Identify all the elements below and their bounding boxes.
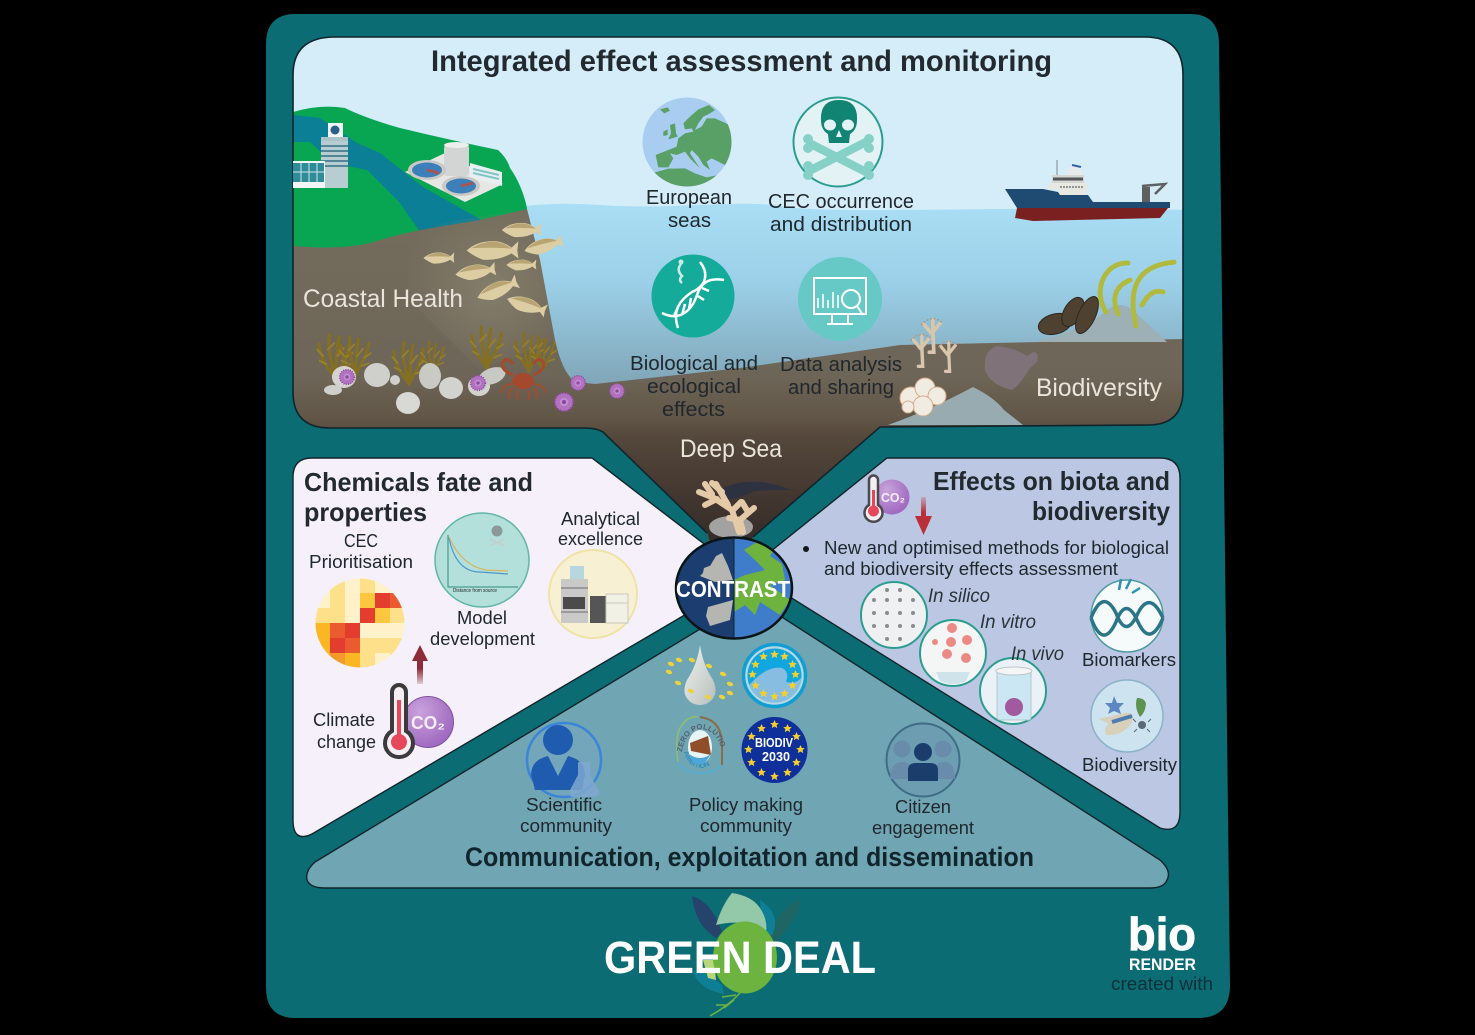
contrast globe logo: CONTRAST	[676, 576, 790, 602]
panel: communication, exploitation and dissemination	[306, 536, 1170, 926]
heading: Effects on biota and	[933, 466, 1170, 496]
icon: co2 bubble	[874, 480, 910, 514]
illustration: corals and sponge on rock	[888, 319, 1023, 425]
label: in silico: In silico	[928, 586, 990, 607]
icon: biodiv 2030: 2030	[762, 749, 790, 764]
illustration: research ship	[1005, 160, 1170, 221]
icon: in silico	[861, 582, 927, 648]
label: scientific community: community	[520, 815, 613, 836]
label: citizen engagement	[872, 796, 974, 838]
label: policy making community	[689, 794, 803, 836]
label: climate change: change	[317, 731, 376, 752]
icon: zero pollution ambition: ZERO POLLUTION	[676, 724, 725, 752]
label: Data analysis	[780, 354, 902, 376]
label: analytical excellence	[558, 508, 643, 549]
label: Biological and	[630, 353, 758, 375]
heading: Communication, exploitation and dissemination	[465, 842, 1034, 872]
label: citizen engagement: engagement	[872, 817, 974, 838]
icon: eu water circle	[744, 644, 806, 710]
label: in vitro: In vitro	[980, 612, 1036, 633]
illustration: rock with mussels and seaweed	[1033, 262, 1176, 342]
label: CEC occurrence	[768, 191, 914, 213]
panel: effects on biota and biodiversity	[760, 458, 1180, 829]
label: analytical excellence: Analytical	[561, 508, 640, 529]
item: european seas	[642, 98, 733, 232]
heat map	[315, 578, 405, 668]
sea floor and cliff	[290, 209, 1190, 560]
icon: co2 bubble	[402, 696, 454, 748]
illustration: flatfish	[985, 346, 1038, 390]
biorender logo: bio	[1128, 908, 1196, 960]
icon: biodiv 2030: BIODIV	[755, 735, 793, 750]
bullet text: New and optimised methods for biological	[824, 537, 1169, 558]
label: citizen engagement: Citizen	[895, 796, 951, 817]
icon: thermometer	[864, 476, 882, 522]
icon: water droplet with eu stars	[665, 645, 734, 705]
biorender logo: created with	[1111, 973, 1213, 994]
item: biological and ecological effects	[630, 254, 758, 421]
illustration: kelp and rocks	[317, 326, 556, 414]
wordmark: GREEN DEAL	[604, 932, 876, 983]
heading: Chemicals fate and	[304, 467, 533, 497]
heading	[304, 467, 533, 527]
model development chart	[435, 513, 529, 607]
label: climate change	[313, 709, 376, 752]
label: model development: Model	[457, 607, 507, 628]
illustration: crab	[501, 359, 546, 400]
illustration: hospital	[293, 123, 348, 188]
arrow: up	[412, 645, 428, 684]
icon: in vivo beaker	[980, 658, 1046, 724]
panel: integrated effect assessment and monitoring	[290, 30, 1190, 560]
marine scene background	[290, 30, 1190, 560]
item: data analysis and sharing: and sharing	[788, 377, 894, 399]
label: model development: development	[430, 628, 535, 649]
label: analytical excellence: excellence	[558, 528, 643, 549]
label: policy making community: Policy making	[689, 794, 803, 815]
icon: scientific community	[527, 723, 601, 797]
icon: in vitro	[920, 620, 986, 690]
arrow: down	[915, 497, 932, 535]
label: scientific community: Scientific	[526, 794, 602, 815]
item: european seas: seas	[668, 210, 711, 232]
icon: co2 bubble: CO₂	[411, 713, 445, 733]
contrast globe logo	[676, 535, 794, 641]
item: biological and ecological effects: effects	[662, 399, 725, 421]
item: biological and ecological effects: ecological	[647, 376, 741, 398]
item: cec occurrence and distribution: and distribution	[770, 214, 912, 236]
illustration: sea urchins	[340, 370, 624, 411]
heading: biodiversity	[1032, 496, 1171, 526]
icon: zero pollution ambition: AMBITION	[684, 752, 710, 768]
foliage	[692, 893, 801, 1016]
biorender logo: RENDER	[1129, 956, 1196, 974]
outer teal frame	[266, 14, 1230, 1018]
coastal land	[293, 107, 527, 250]
model development chart: Distance from source	[453, 588, 497, 594]
label: scientific community	[520, 794, 613, 836]
icon: biodiv 2030	[742, 717, 808, 783]
biorender logo	[1111, 908, 1213, 994]
panel: chemicals fate and properties	[293, 458, 712, 837]
icon: thermometer	[385, 685, 413, 757]
item: data analysis and sharing	[780, 257, 902, 399]
icon: co2 bubble: CO₂	[881, 490, 905, 505]
heading: properties	[304, 497, 427, 527]
label: biodiversity: Biodiversity	[1082, 754, 1178, 775]
label: coastal health: Coastal Health	[303, 285, 463, 313]
illustration: fish school	[423, 223, 564, 318]
label: biodiversity: Biodiversity	[1036, 374, 1162, 402]
label: cec prioritisation	[309, 530, 413, 572]
label: deep sea: Deep Sea	[680, 435, 782, 463]
label: policy making community: community	[700, 815, 793, 836]
green deal logo	[604, 893, 876, 1016]
label: cec prioritisation: Prioritisation	[309, 551, 413, 572]
icon: citizen engagement	[886, 724, 960, 796]
item: cec occurrence and distribution	[768, 98, 914, 236]
icon: analytical instrument	[549, 550, 637, 638]
icon: biodiversity species	[1091, 680, 1163, 752]
panel outline	[293, 37, 1183, 537]
illustration: deep sea coral and fish	[699, 482, 790, 538]
label: climate change: Climate	[313, 709, 375, 730]
title: Integrated effect assessment and monitoring	[431, 45, 1052, 78]
icon: zero pollution ambition	[676, 716, 725, 774]
bullet text: and biodiversity effects assessment	[824, 558, 1118, 579]
illustration: wastewater treatment plant	[405, 142, 503, 202]
bullet text	[803, 537, 1169, 579]
label: European	[646, 187, 732, 209]
label: cec prioritisation: CEC	[344, 530, 378, 551]
label: biomarkers: Biomarkers	[1082, 649, 1176, 670]
label: model development	[430, 607, 535, 649]
heading	[933, 466, 1171, 526]
icon: biomarkers dna	[1091, 579, 1163, 652]
label: in vivo: In vivo	[1011, 644, 1064, 665]
